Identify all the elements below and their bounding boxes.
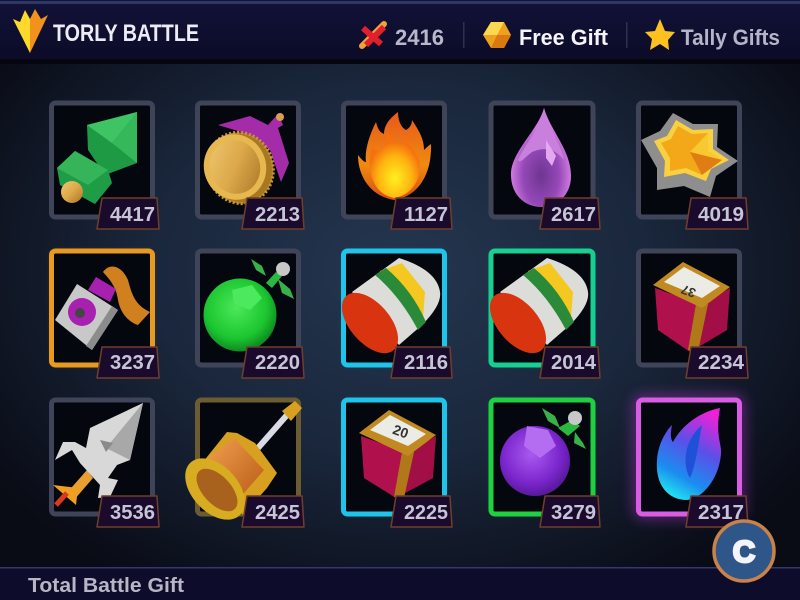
count badge: 2116 (404, 352, 448, 374)
item 5: gold star (638, 103, 748, 229)
item 4: purple drop (491, 103, 600, 229)
item 13: red crate 20 (344, 400, 452, 527)
item 9: drum, teal frame (479, 251, 600, 378)
icon: gold star (645, 19, 675, 50)
count badge: 2617 (551, 204, 596, 226)
count badge: 2213 (255, 204, 300, 226)
crate number: 37 (679, 282, 698, 301)
count badge: 2014 (551, 352, 597, 374)
item 7: green orb (198, 251, 304, 378)
item 11: silver sword (52, 400, 159, 527)
item 3: fire (344, 103, 452, 229)
round C button (714, 521, 774, 581)
count badge: 4019 (698, 204, 744, 226)
logo title: TORLY BATTLE (53, 20, 199, 47)
count badge: 1127 (404, 204, 448, 226)
count badge: 3279 (551, 502, 596, 524)
count badge: 3237 (110, 352, 155, 374)
count badge: 4417 (110, 204, 155, 226)
footer label: Total Battle Gift (28, 575, 184, 597)
item 12: copper hammer (174, 400, 304, 531)
tally gifts label: Tally Gifts (681, 25, 780, 50)
item 10: red crate 37 (638, 251, 748, 378)
round C button: C (733, 534, 755, 569)
count badge: 3536 (110, 502, 155, 524)
count badge: 2220 (255, 352, 300, 374)
footer bar (0, 567, 800, 600)
item 6: silver bottle (52, 251, 159, 378)
count badge: 2234 (698, 352, 745, 374)
item 1: green gem (52, 103, 159, 229)
header bar (0, 0, 800, 64)
item 15: blue flame (638, 400, 748, 527)
count badge: 2225 (404, 502, 448, 524)
free gift label: Free Gift (519, 25, 609, 50)
item 14: purple orb (491, 400, 600, 527)
icon: crown logo (13, 9, 48, 53)
item 2: gold coin (195, 103, 304, 229)
item 8: drum, cyan frame (331, 251, 452, 378)
icon: gift hexagon (483, 22, 511, 48)
icon: red cross (362, 24, 384, 46)
counter value: 2416 (395, 25, 444, 50)
crate number: 20 (391, 421, 411, 442)
count badge: 2317 (698, 502, 744, 524)
count badge: 2425 (255, 502, 300, 524)
